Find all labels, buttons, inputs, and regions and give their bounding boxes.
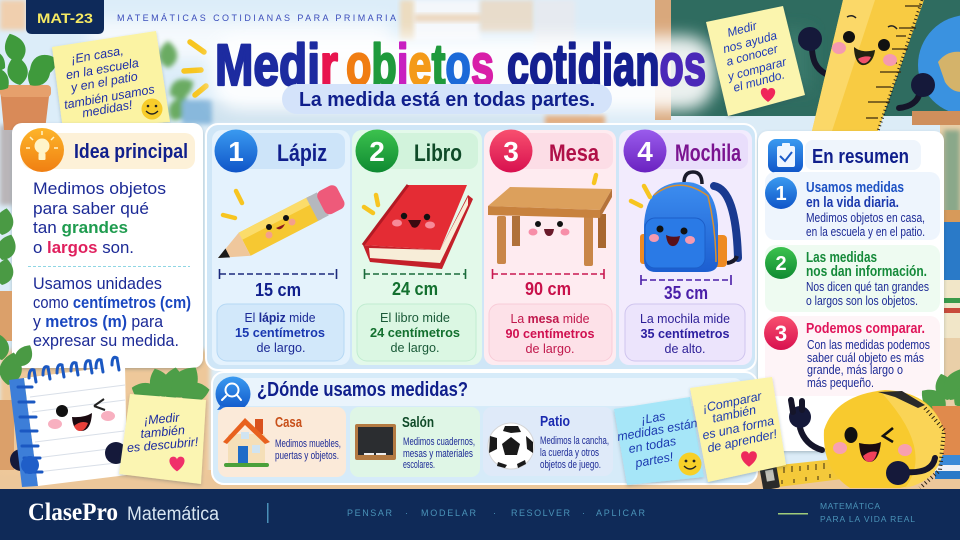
icon: soccer ball — [488, 423, 534, 469]
icon: blackboard — [355, 424, 396, 460]
summary item 3: Con las medidas podemos — [807, 338, 930, 352]
idea text 1 — [33, 179, 166, 257]
footer steps: MODELAR — [421, 508, 476, 518]
summary item 1: Medimos objetos en casa, — [806, 211, 925, 225]
idea text 2: y metros (m) para — [33, 313, 164, 331]
tile: salón: mesas y materiales — [403, 448, 473, 460]
card: libro: Libro — [414, 140, 462, 167]
caption box: La mochila mide — [640, 311, 730, 326]
panel: idea principal — [12, 123, 203, 368]
title: cotidianos — [507, 33, 706, 98]
summary item 1: en la vida diaria. — [806, 195, 899, 211]
icon: house — [223, 418, 270, 467]
caption box — [357, 304, 476, 361]
card: mesa: 3 — [503, 136, 519, 167]
note: medir nos ayuda: Medir — [726, 18, 759, 40]
notebook face — [48, 399, 115, 431]
note: medir también es descubrir: es descubrir! — [126, 435, 199, 455]
icon: light bulb — [20, 128, 64, 172]
note: comparar también: de aprender! — [706, 427, 779, 455]
caption box — [489, 304, 612, 361]
note: medir nos ayuda: nos ayuda — [721, 28, 779, 56]
tape strip — [759, 458, 850, 490]
plant behind note — [159, 41, 212, 125]
caption box: 90 centímetros — [506, 326, 594, 341]
notebook spiral — [18, 357, 119, 472]
icon: backpack — [631, 172, 738, 272]
summary item 1: Usamos medidas — [806, 180, 904, 196]
icon: smiley — [678, 452, 702, 476]
note: comparar también: también — [711, 403, 757, 426]
tape face — [833, 427, 912, 462]
icon: book — [363, 185, 473, 269]
footer steps: · — [405, 508, 408, 518]
measure line — [492, 273, 604, 275]
panel: dónde usamos medidas — [212, 372, 757, 484]
measure line — [641, 279, 731, 281]
title: objetos — [346, 33, 494, 98]
caption box — [217, 304, 344, 361]
footer steps: PENSAR — [347, 508, 392, 518]
tile: salón — [350, 407, 480, 477]
caption box: de largo. — [256, 340, 306, 355]
tile: patio: Medimos la cancha, — [540, 435, 609, 447]
note: medir nos ayuda: a conocer — [725, 41, 780, 69]
brand — [28, 499, 219, 526]
tile: patio: objetos de juego. — [540, 459, 601, 471]
measure line — [220, 273, 336, 275]
card: mochila: 4 — [637, 136, 653, 167]
summary item 1: 1 — [775, 183, 787, 205]
tile: casa: Casa — [275, 415, 303, 431]
note: medir nos ayuda: y comparar — [725, 54, 789, 84]
note: las medidas están en todas partes — [614, 397, 704, 485]
icon: pencil — [212, 183, 347, 270]
panel: en resumen — [758, 131, 944, 451]
summary item 1 — [765, 172, 940, 240]
idea text 1: o largos son. — [33, 238, 134, 257]
summary item 3: 3 — [775, 321, 787, 346]
measure line — [364, 273, 466, 275]
note: comparar también: es una forma — [701, 414, 775, 443]
summary item 2: Las medidas — [806, 250, 877, 266]
caption box: de largo. — [526, 341, 574, 356]
card: mesa: 90 cm — [525, 279, 571, 299]
idea heading — [22, 133, 195, 169]
notebook hand — [105, 442, 127, 464]
card: lápiz: 15 cm — [255, 280, 301, 300]
header tab: MAT-23 — [26, 0, 104, 34]
icon: smiley — [142, 98, 162, 120]
summary item 3: más pequeño. — [807, 376, 874, 390]
notebook character — [9, 357, 127, 487]
footer steps — [347, 508, 646, 518]
brand: Matemática — [127, 504, 219, 525]
tape arm raised — [789, 400, 822, 450]
yellow ruler character — [798, 0, 935, 131]
tile: salón: Salón — [402, 415, 434, 431]
note: en casa: ¡En casa, — [70, 44, 125, 67]
card: mochila — [619, 130, 752, 365]
card: libro — [352, 130, 482, 365]
panel: objetos medidos — [206, 124, 756, 370]
summary item 3 — [764, 316, 940, 396]
summary heading — [805, 140, 921, 170]
ruler right arm — [899, 73, 935, 108]
plant with pot, top left — [0, 30, 62, 130]
tile: patio — [483, 407, 613, 476]
card: mesa — [484, 130, 616, 365]
summary item 2: nos dan información. — [806, 264, 927, 280]
caption box: de alto. — [664, 341, 706, 356]
caption box: La mesa mide — [510, 311, 590, 326]
note: en casa: también usamos — [63, 82, 156, 112]
note: las medidas están en todas partes: partes! — [633, 450, 675, 470]
card: lápiz: Lápiz — [277, 140, 327, 167]
idea text 1: Medimos objetos — [33, 179, 166, 198]
note: en casa: y en el patio — [69, 69, 139, 95]
title sunburst strokes — [184, 42, 206, 95]
tape hand — [886, 458, 935, 485]
tape body — [824, 390, 945, 488]
idea text 2: expresar su medida. — [33, 332, 179, 350]
footer tagline: MATEMÁTICA — [820, 501, 880, 511]
footer steps: · — [582, 508, 585, 518]
footer steps: APLICAR — [596, 508, 646, 518]
icon: magnifier bubble — [216, 376, 250, 412]
card: mesa: Mesa — [549, 140, 600, 167]
note: comparar también — [690, 377, 786, 482]
left edge plants — [0, 207, 45, 470]
idea text 1: para saber qué — [33, 199, 149, 218]
icon: heart — [169, 457, 185, 471]
footer steps: RESOLVER — [511, 508, 570, 518]
summary item 2 — [765, 245, 940, 312]
summary heading: En resumen — [812, 145, 909, 168]
card: lápiz: 1 — [228, 136, 244, 167]
card: lápiz — [212, 130, 350, 365]
summary item 2: 2 — [775, 253, 787, 275]
title glow — [210, 36, 715, 110]
caption box — [625, 304, 745, 361]
title — [215, 33, 706, 98]
icon: heart — [741, 451, 757, 467]
tile: salón: Medimos cuadernos, — [403, 436, 475, 448]
summary item 3: saber cuál objeto es más — [807, 351, 924, 365]
caption box: 15 centímetros — [235, 325, 325, 340]
note: medir nos ayuda — [706, 6, 805, 116]
note: en casa: en la escuela — [65, 56, 140, 82]
footer band — [0, 489, 960, 540]
ruler left arm — [798, 27, 826, 74]
idea text 2: como centímetros (cm) — [33, 294, 191, 312]
note: medir también es descubrir — [119, 394, 206, 484]
header tagline: MATEMÁTICAS COTIDIANAS PARA PRIMARIA — [117, 13, 396, 23]
plant, pot and books bottom right — [916, 365, 960, 479]
caption box: 24 centímetros — [370, 325, 460, 340]
icon: clipboard — [768, 139, 803, 173]
note: medir también es descubrir: también — [140, 423, 185, 441]
subtitle pill — [282, 84, 612, 114]
note: en casa — [52, 31, 170, 130]
notebook body — [9, 365, 127, 487]
idea text 2: Usamos unidades — [33, 275, 162, 293]
tile: casa: Medimos muebles, — [275, 438, 341, 450]
subtitle pill: La medida está en todas partes. — [299, 89, 595, 111]
note: medir nos ayuda: el mundo. — [732, 68, 786, 95]
idea text 2 — [33, 275, 191, 350]
card: libro: 24 cm — [392, 279, 438, 299]
note: las medidas están en todas partes: ¡Las — [640, 409, 667, 427]
brand: ClasePro — [28, 499, 118, 526]
card: libro: 2 — [369, 136, 385, 167]
note: en casa: medidas! — [81, 98, 134, 120]
note: medir también es descubrir: ¡Medir — [143, 410, 181, 428]
tape measure character — [759, 390, 945, 490]
notebook arm — [10, 449, 32, 471]
note: las medidas están en todas partes: en todas — [627, 434, 677, 456]
footer tagline — [820, 501, 915, 524]
footer tagline: PARA LA VIDA REAL — [820, 514, 915, 524]
card: mochila: 35 cm — [664, 283, 708, 303]
summary item 3: Podemos comparar. — [806, 321, 925, 337]
note: las medidas están en todas partes: medidas están — [616, 416, 699, 444]
caption box: de largo. — [390, 340, 440, 355]
summary item 2: Nos dicen qué tan grandes — [806, 280, 929, 294]
summary item 1: en la escuela y en el patio. — [806, 225, 925, 239]
idea text 1: tan grandes — [33, 218, 128, 237]
icon: table — [488, 175, 612, 266]
title: Medir — [215, 33, 338, 98]
where heading: ¿Dónde usamos medidas? — [257, 379, 468, 401]
header tab: MAT-23: MAT-23 — [37, 10, 93, 26]
summary item 2: o largos son los objetos. — [806, 294, 918, 308]
globe — [912, 15, 960, 125]
tile: patio: Patio — [540, 414, 570, 430]
note: comparar también: ¡Comparar — [701, 389, 764, 415]
idea heading: Idea principal — [74, 140, 188, 163]
tile: casa — [218, 407, 346, 477]
summary item 3: grande, más largo o — [807, 363, 903, 377]
caption box: El libro mide — [380, 310, 450, 325]
footer steps: · — [493, 508, 496, 518]
tile: casa: puertas y objetos. — [275, 450, 339, 462]
plant behind notebook — [128, 361, 211, 408]
tile: salón: escolares. — [403, 459, 435, 471]
tile: patio: la cuerda y otros — [540, 447, 599, 459]
card: mochila: Mochila — [675, 140, 741, 167]
caption box: El lápiz mide — [244, 310, 316, 325]
icon: heart — [761, 88, 775, 102]
caption box: 35 centímetros — [640, 326, 730, 341]
